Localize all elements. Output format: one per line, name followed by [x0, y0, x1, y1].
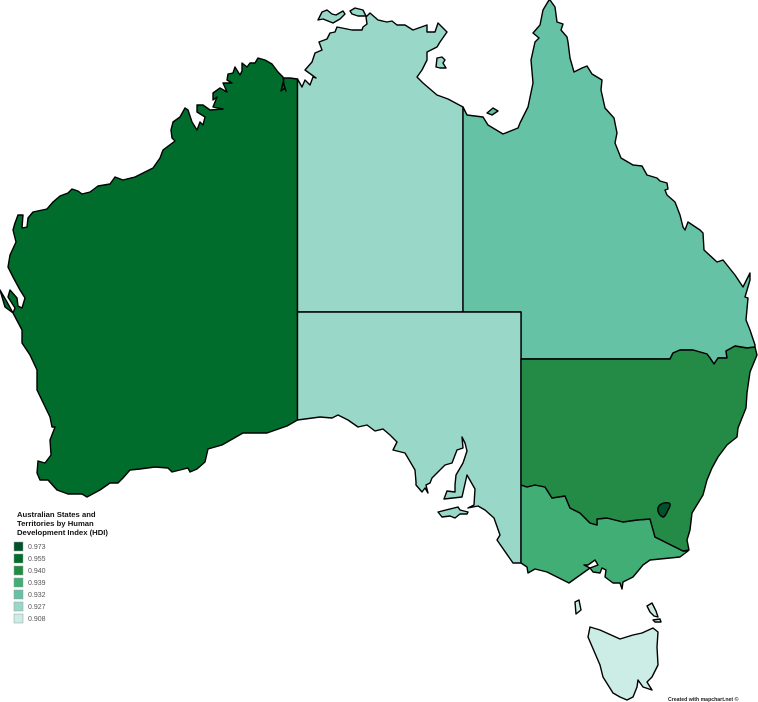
legend item: 0.940: 0.940 — [28, 568, 46, 575]
region: Western Australia — [0, 58, 298, 497]
region: Northern Territory — [298, 8, 463, 312]
legend title: Australian States and — [17, 510, 96, 519]
island: Cape Barren Island — [653, 619, 661, 622]
region: Tasmania — [575, 600, 661, 700]
island: Flinders Island — [647, 603, 658, 617]
region: Queensland — [463, 0, 755, 364]
island: Melville — [350, 8, 366, 16]
legend item: 0.939: 0.939 — [28, 580, 46, 587]
legend item: 0.973: 0.973 — [28, 544, 46, 551]
island: King Island — [575, 600, 581, 614]
legend title: Territories by Human — [17, 519, 94, 528]
island: Mornington — [487, 108, 498, 115]
legend item: 0.927: 0.927 — [28, 604, 46, 611]
island: Kangaroo Island — [438, 507, 468, 518]
legend title: Development Index (HDI) — [17, 528, 108, 537]
legend item: 0.932: 0.932 — [28, 592, 46, 599]
legend — [14, 510, 108, 623]
region: Australian Capital Territory — [658, 503, 670, 517]
island: Tiwi — [318, 10, 345, 23]
legend item: 0.908: 0.908 — [28, 616, 46, 623]
region: South Australia — [298, 312, 521, 563]
island: Groote Eylandt — [436, 57, 446, 68]
legend item: 0.955: 0.955 — [28, 556, 46, 563]
region: Victoria — [521, 485, 688, 589]
region: New South Wales — [521, 346, 757, 551]
